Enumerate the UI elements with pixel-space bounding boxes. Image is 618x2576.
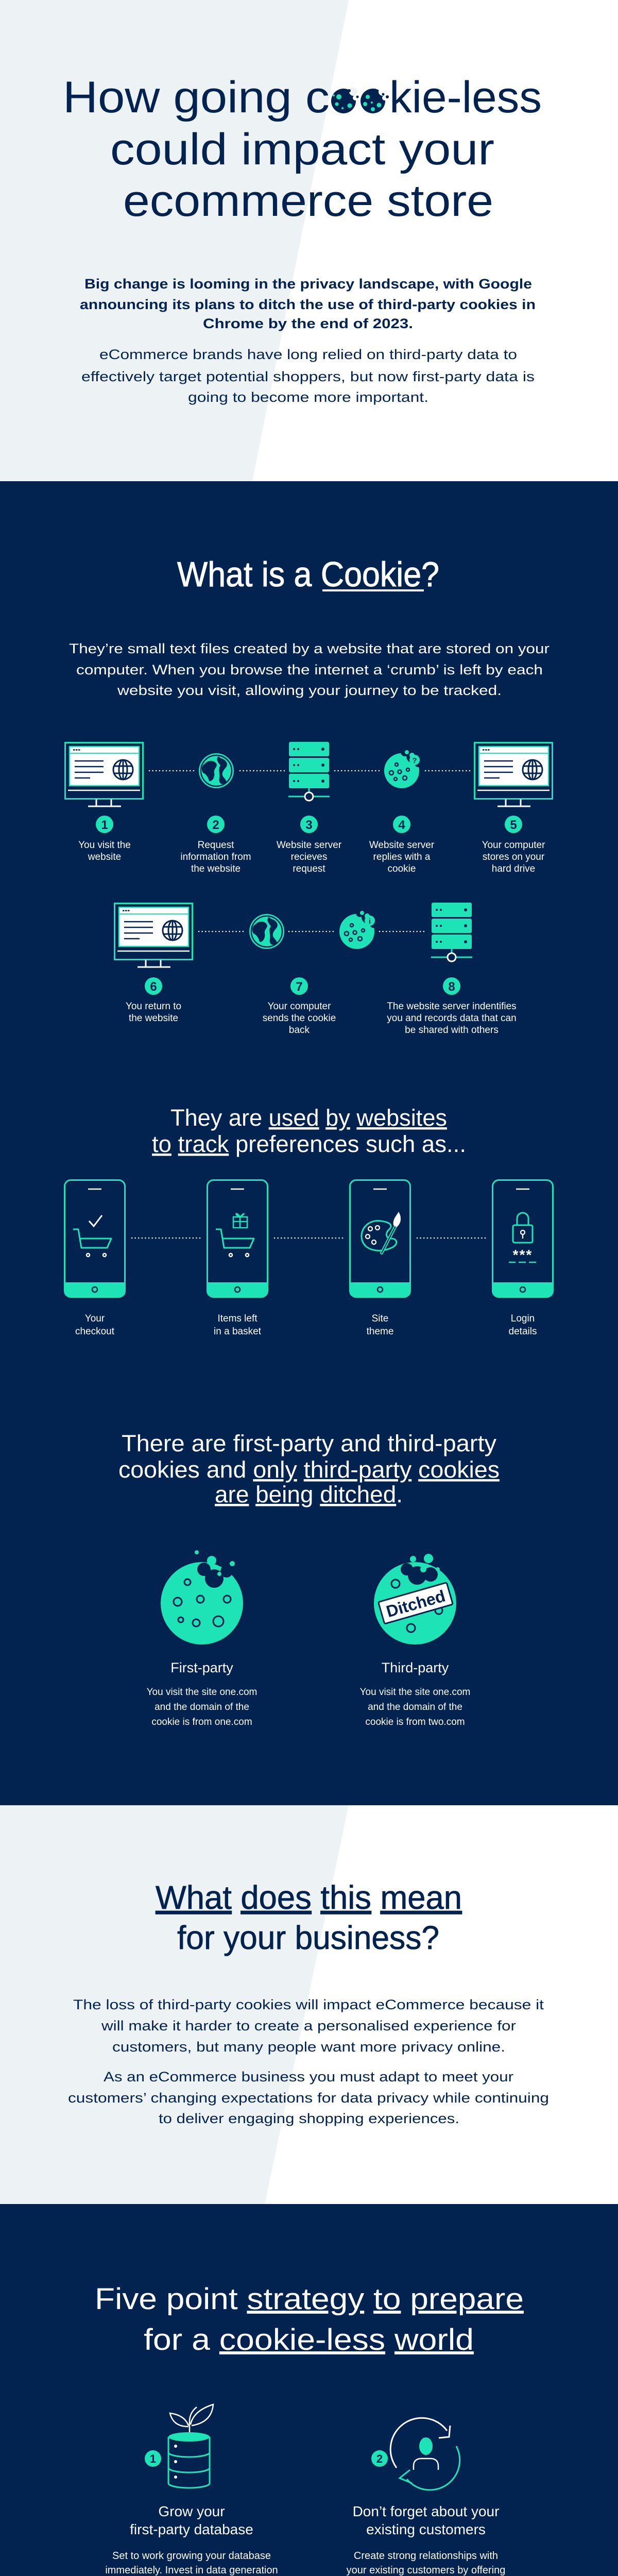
intro text: Chrome by the end of 2023. — [203, 316, 413, 331]
step 2: 2 — [212, 818, 219, 832]
strategy 1: grow database: first-party database — [130, 2521, 253, 2537]
intro text: going to become more important. — [188, 389, 428, 405]
strategy 2: existing customers: your existing customers by offering — [347, 2565, 505, 2576]
title: ecommerce store — [123, 176, 493, 226]
heading: used by websites: to track preferences such as... — [152, 1131, 466, 1157]
panel: what does this mean — [0, 1805, 618, 2204]
heading: what is a cookie: What is a Cookie? — [177, 555, 439, 594]
background: intro — [0, 0, 618, 481]
strategy 2: existing customers: 2 — [376, 2452, 383, 2465]
heading: first and third party — [118, 1430, 500, 1507]
heading: what does this mean: for your business? — [177, 1919, 439, 1956]
step 2: the website — [191, 863, 241, 874]
phone: login: *** — [513, 1247, 533, 1263]
cookie: third-party ditched — [360, 1554, 470, 1727]
text block: impact: to deliver engaging shopping experiences. — [159, 2111, 459, 2126]
phone: login: details — [509, 1326, 537, 1337]
step 5: Your computer — [482, 840, 545, 851]
phone: basket: Items left — [217, 1313, 258, 1324]
step 2: information from — [180, 852, 251, 862]
step 7: back — [289, 1025, 310, 1036]
strategy 2: existing customers: Create strong relationships with — [354, 2550, 498, 2562]
heading: used by websites — [152, 1105, 466, 1157]
step 2: Request — [198, 840, 234, 851]
step 3: Website server — [277, 840, 342, 851]
text block: cookie definition: website you visit, allowing your journey to be tracked. — [117, 683, 502, 698]
title: How going c — [63, 73, 330, 122]
strategy 2: existing customers — [345, 2418, 507, 2576]
step 3: recieves — [291, 852, 327, 862]
step 1: 1 — [101, 818, 108, 832]
strategy 2: existing customers: Don’t forget about your — [353, 2503, 499, 2519]
step 3: 3 — [305, 818, 313, 832]
phone: site theme: Site — [372, 1313, 388, 1324]
heading: five point strategy: Five point strategy to prepare — [95, 2282, 524, 2316]
phone: login — [492, 1180, 553, 1337]
step 8: you and records data that can — [387, 1013, 517, 1024]
phone: site theme: theme — [367, 1326, 393, 1337]
panel: what is a cookie — [0, 481, 618, 1805]
phone: checkout: Your — [85, 1313, 105, 1324]
intro text: announcing its plans to ditch the use of third-party cookies in — [80, 297, 536, 312]
dotted connectors phones — [132, 1238, 486, 1239]
heading: what does this mean: What does this mean — [156, 1879, 462, 1916]
step 1 — [65, 743, 143, 862]
text block: cookie definition — [69, 641, 550, 698]
strategy 1: grow database: immediately. Invest in data generation — [105, 2565, 278, 2576]
step 3 — [277, 742, 342, 874]
panel: five point strategy — [0, 2204, 618, 2576]
step 6: 6 — [150, 980, 157, 994]
step 5: hard drive — [492, 863, 535, 874]
step 4: ? — [412, 756, 417, 765]
step 5: stores on your — [483, 852, 545, 862]
strategy 1: grow database: Set to work growing your database — [112, 2550, 271, 2562]
cookie: first-party — [147, 1550, 257, 1727]
cookie: first-party: First-party — [170, 1660, 233, 1675]
step 7: 7 — [296, 980, 303, 994]
phone: login: Login — [511, 1313, 535, 1324]
heading: first and third party: are being ditched. — [215, 1481, 403, 1507]
phone: basket — [207, 1180, 268, 1337]
step 7: i — [369, 917, 371, 926]
step 2 — [180, 753, 251, 874]
strategy 1: grow database: Grow your — [158, 2503, 225, 2519]
heading: used by websites: They are used by websites — [170, 1105, 447, 1131]
phone: basket: in a basket — [214, 1326, 262, 1337]
step 6: You return to — [126, 1001, 181, 1012]
cookie: third-party ditched: cookie is from two.com — [365, 1717, 465, 1727]
text block: cookie definition: computer. When you browse the internet a ‘crumb’ is left by each — [76, 662, 543, 677]
cookie: third-party ditched: Third-party — [382, 1660, 449, 1675]
step 4 — [369, 748, 435, 874]
step 1: You visit the — [78, 840, 131, 851]
step 4: cookie — [388, 863, 416, 874]
step 6 — [114, 904, 193, 1024]
step 8: The website server indentifies — [387, 1001, 517, 1012]
phone: site theme — [350, 1180, 410, 1337]
step 8: be shared with others — [405, 1025, 499, 1036]
title: could impact your — [110, 125, 494, 174]
dotted connectors row 1 — [149, 771, 470, 931]
step 7: Your computer — [268, 1001, 331, 1012]
text block: impact: As an eCommerce business you must adapt to meet your — [104, 2069, 513, 2084]
title: kie-less — [389, 73, 542, 122]
cookie: first-party: cookie is from one.com — [151, 1717, 252, 1727]
heading: first and third party: cookies and only third-party cookies — [118, 1456, 500, 1483]
text block: impact — [68, 1997, 549, 2126]
stamp: ditched: Ditched — [384, 1586, 448, 1621]
text block: impact: The loss of third-party cookies will impact eCommerce because it — [73, 1997, 544, 2012]
heading: five point strategy: for a cookie-less world — [144, 2323, 474, 2357]
heading: five point strategy — [95, 2282, 524, 2357]
phone: checkout: checkout — [75, 1326, 115, 1337]
step 5: 5 — [510, 818, 517, 832]
strategy 2: existing customers: existing customers — [366, 2521, 486, 2537]
intro text: Big change is looming in the privacy landscape, with Google — [84, 276, 532, 292]
step 3: request — [293, 863, 325, 874]
intro text: effectively target potential shoppers, but now first-party data is — [81, 369, 535, 384]
cookie: third-party ditched: and the domain of the — [368, 1702, 462, 1713]
step 7 — [249, 909, 377, 1036]
heading: first and third party: There are first-party and third-party — [122, 1430, 497, 1456]
step 8 — [387, 903, 517, 1036]
step 4: 4 — [398, 818, 405, 832]
text block: impact: customers, but many people want more privacy online. — [112, 2039, 505, 2055]
step 1: website — [88, 852, 121, 862]
text block: cookie definition: They’re small text files created by a website that are stored on your — [69, 641, 550, 656]
step 4: Website server — [369, 840, 435, 851]
strategy 1: grow database — [101, 2404, 282, 2576]
cookie: third-party ditched: You visit the site one.com — [360, 1687, 470, 1698]
step 4: replies with a — [373, 852, 431, 862]
icon: title cookies — [331, 88, 389, 113]
cookie: first-party: and the domain of the — [154, 1702, 249, 1713]
text block: impact: customers’ changing expectations for data privacy while continuing — [68, 2090, 549, 2106]
step 8: 8 — [448, 980, 455, 994]
intro text: eCommerce brands have long relied on third-party data to — [99, 347, 517, 362]
intro text — [80, 276, 536, 405]
phone: checkout — [65, 1180, 125, 1337]
text block: impact: will make it harder to create a personalised experience for — [101, 2018, 516, 2033]
cookie: first-party: You visit the site one.com — [147, 1687, 257, 1698]
title — [63, 73, 542, 226]
heading: what does this mean — [156, 1879, 462, 1956]
step 6: the website — [129, 1013, 178, 1024]
step 5 — [475, 743, 552, 874]
strategy 1: grow database: 1 — [150, 2452, 156, 2465]
step 7: sends the cookie — [263, 1013, 336, 1024]
